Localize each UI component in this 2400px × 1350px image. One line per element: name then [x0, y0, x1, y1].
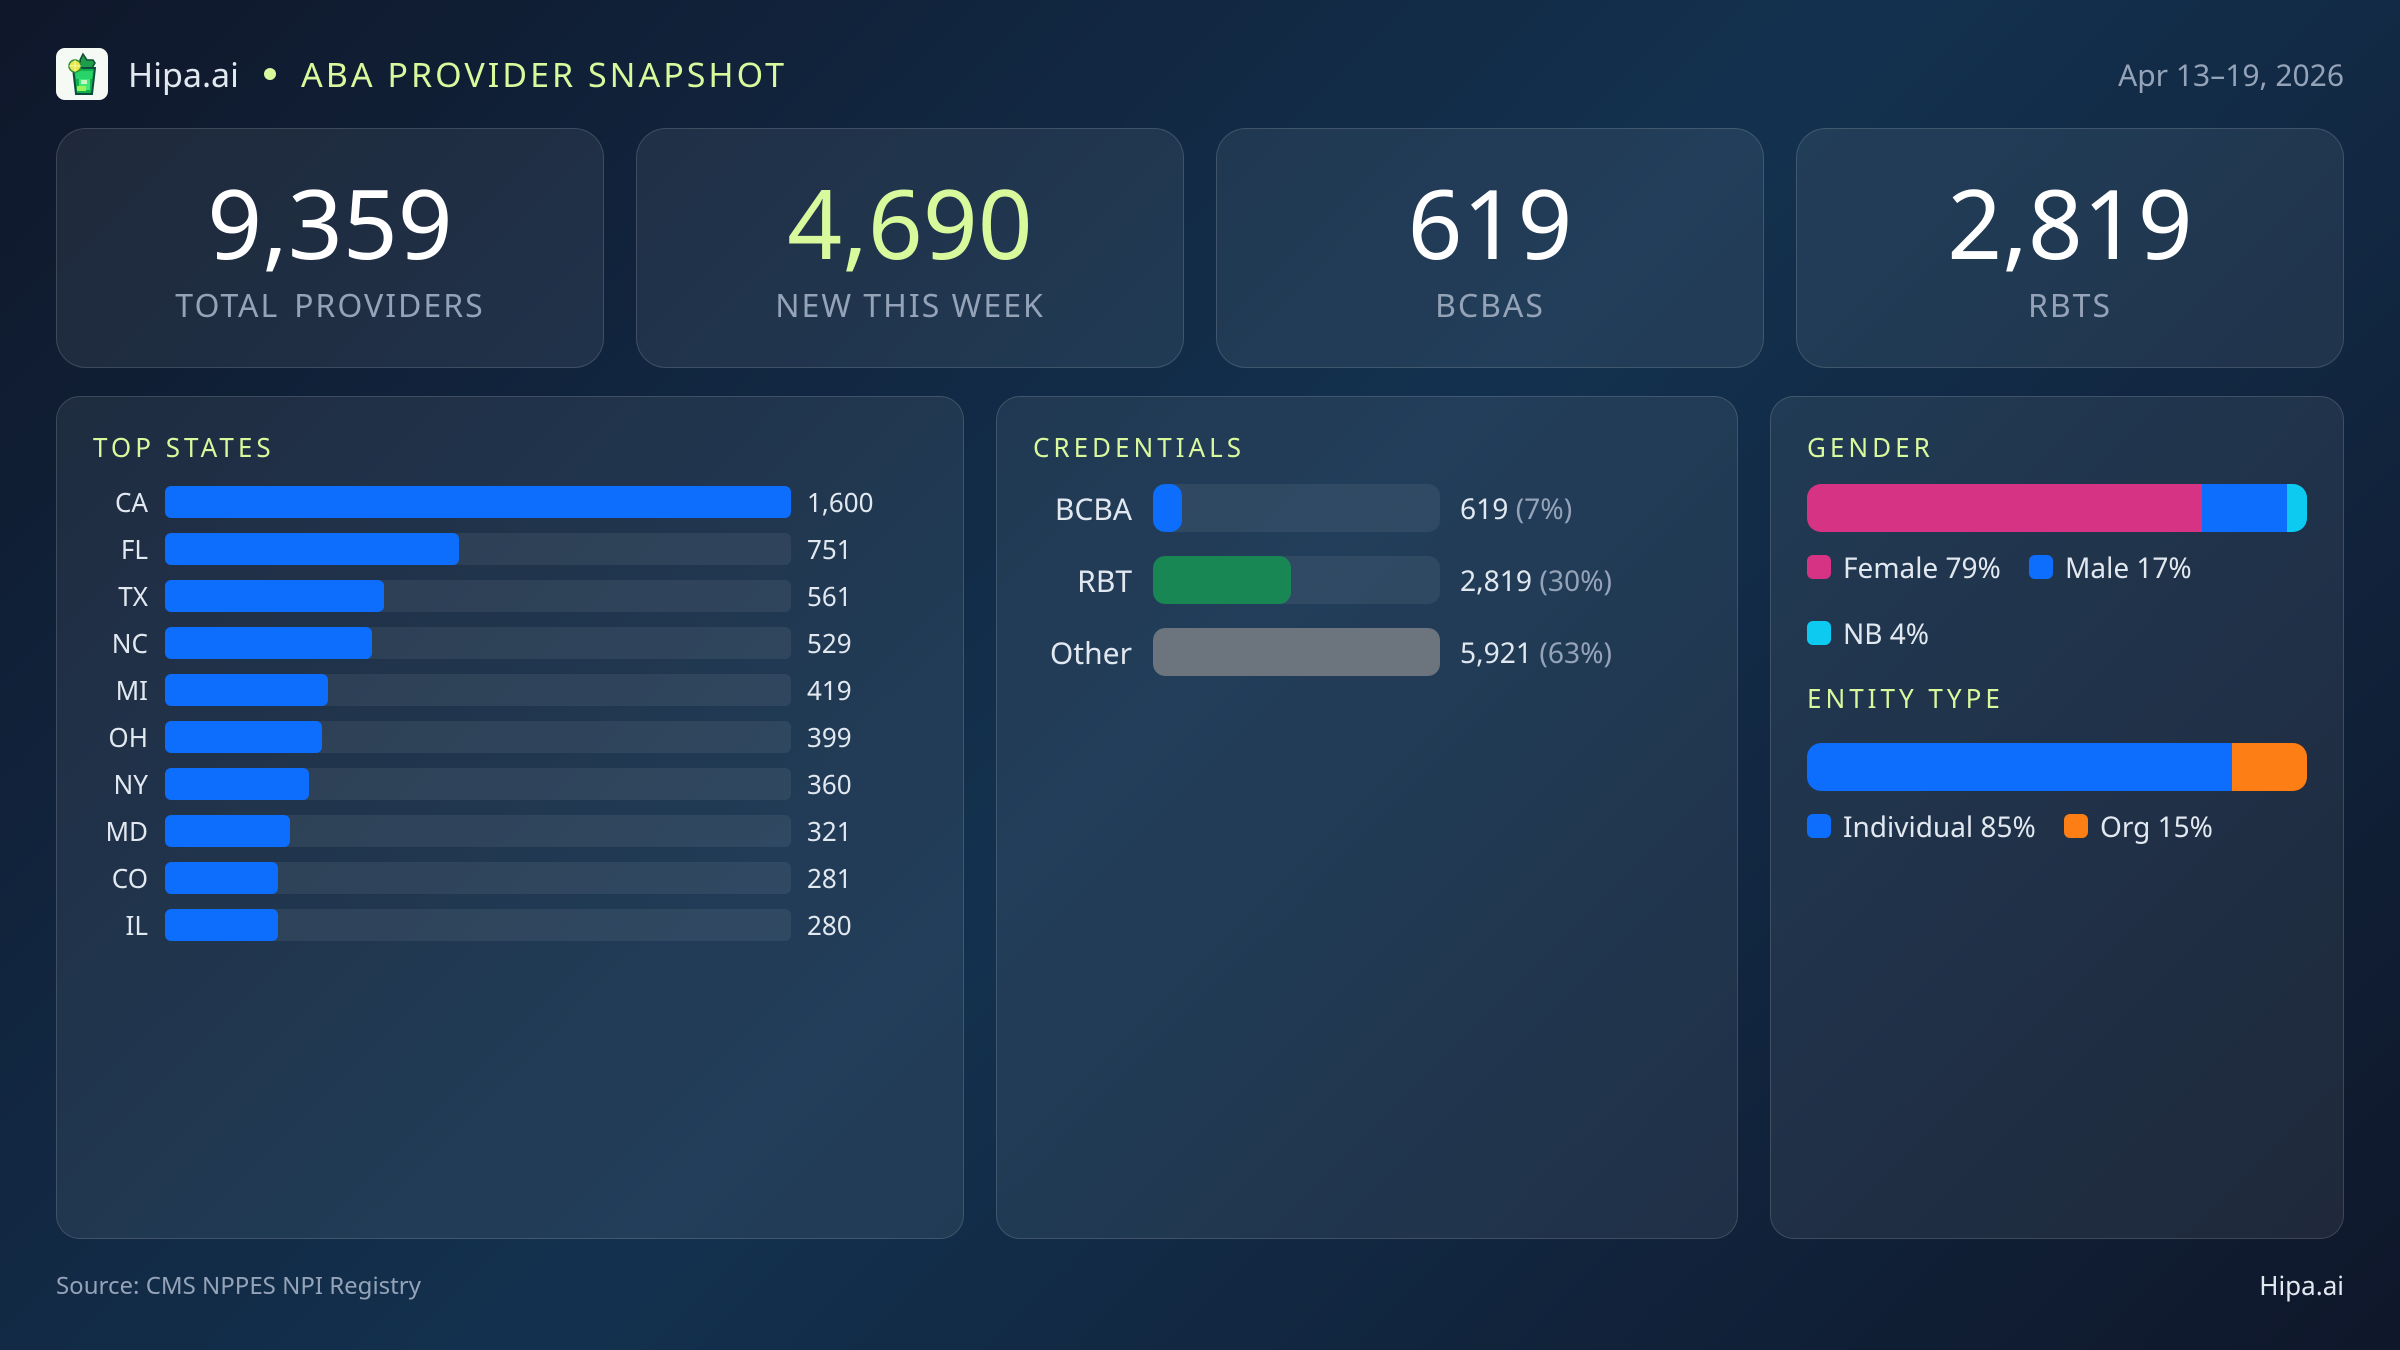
brand name: Hipa.ai — [128, 51, 239, 97]
bar: NY — [114, 766, 852, 802]
value: 2,819 — [1947, 157, 2193, 288]
icon: mojito logo — [56, 48, 108, 100]
value: 4,690 — [787, 157, 1033, 288]
bar: CA — [115, 484, 873, 520]
stacked bar: gender — [1807, 484, 2307, 532]
label: BCBAS — [1435, 284, 1545, 327]
bar: RBT: 2,819 (30%) — [1460, 562, 1612, 600]
bar: Other: Other — [1050, 632, 1132, 673]
bar: OH: OH — [108, 719, 148, 755]
stat card: BCBAs — [1216, 128, 1764, 368]
stacked bar: entity type — [1807, 743, 2307, 791]
bar: RBT — [1077, 556, 1612, 604]
footer source: Source: CMS NPPES NPI Registry — [56, 1269, 421, 1302]
stat card: new this week — [636, 128, 1184, 368]
legend: female: Female 79% — [1843, 549, 2001, 587]
label: NEW THIS WEEK — [775, 284, 1045, 327]
bar: FL: FL — [121, 531, 148, 567]
legend: org: Org 15% — [2100, 808, 2213, 846]
bar: NY: 360 — [807, 766, 852, 802]
bar: CO: CO — [112, 860, 148, 896]
bar: TX: TX — [118, 578, 148, 614]
heading: TOP STATES — [93, 429, 275, 465]
label: TOTAL PROVIDERS — [175, 284, 485, 327]
date range: Apr 13–19, 2026 — [2118, 54, 2344, 95]
panel: gender and entity type — [1770, 396, 2344, 1239]
bar: NC: 529 — [807, 625, 852, 661]
bar: TX — [118, 578, 852, 614]
bar: CO: 281 — [807, 860, 852, 896]
bar: MI: 419 — [807, 672, 852, 708]
bar: NC — [112, 625, 852, 661]
bar: MD: MD — [105, 813, 148, 849]
bar: FL: 751 — [807, 531, 852, 567]
header — [56, 48, 2344, 100]
bar: NC: NC — [112, 625, 148, 661]
bar: Other — [1050, 628, 1612, 676]
legend: non-binary: NB 4% — [1843, 615, 1929, 653]
bar: IL — [126, 907, 852, 943]
legend: male: Male 17% — [2065, 549, 2192, 587]
heading: CREDENTIALS — [1033, 429, 1245, 465]
footer brand: Hipa.ai — [2259, 1267, 2344, 1303]
bar: MD: 321 — [807, 813, 852, 849]
report title: ABA PROVIDER SNAPSHOT — [301, 51, 787, 97]
bar: IL: IL — [126, 907, 148, 943]
value: 9,359 — [207, 157, 453, 288]
bar: NY: NY — [114, 766, 148, 802]
bar: MI: MI — [116, 672, 148, 708]
bar: OH: 399 — [807, 719, 852, 755]
bar: MD — [105, 813, 852, 849]
legend: individual: Individual 85% — [1843, 808, 2036, 846]
bar: IL: 280 — [807, 907, 852, 943]
stat card: RBTs — [1796, 128, 2344, 368]
bar: CA: CA — [115, 484, 148, 520]
bar: RBT: RBT — [1077, 560, 1132, 601]
heading: gender: GENDER — [1807, 429, 1934, 465]
panel: top states — [56, 396, 964, 1239]
bar: FL — [121, 531, 852, 567]
bar: BCBA: BCBA — [1055, 488, 1132, 529]
bar: CO — [112, 860, 852, 896]
bar: CA: 1,600 — [807, 484, 873, 520]
stat card: total providers — [56, 128, 604, 368]
heading: entity type: ENTITY TYPE — [1807, 680, 2004, 716]
bar: BCBA — [1055, 484, 1572, 532]
bar: TX: 561 — [807, 578, 852, 614]
label: RBTS — [2028, 284, 2112, 327]
bullet — [264, 68, 276, 80]
bar: Other: 5,921 (63%) — [1460, 634, 1612, 672]
bar: MI — [116, 672, 852, 708]
panel: credentials — [996, 396, 1738, 1239]
value: 619 — [1408, 157, 1572, 288]
bar: BCBA: 619 (7%) — [1460, 490, 1572, 528]
bar: OH — [108, 719, 852, 755]
